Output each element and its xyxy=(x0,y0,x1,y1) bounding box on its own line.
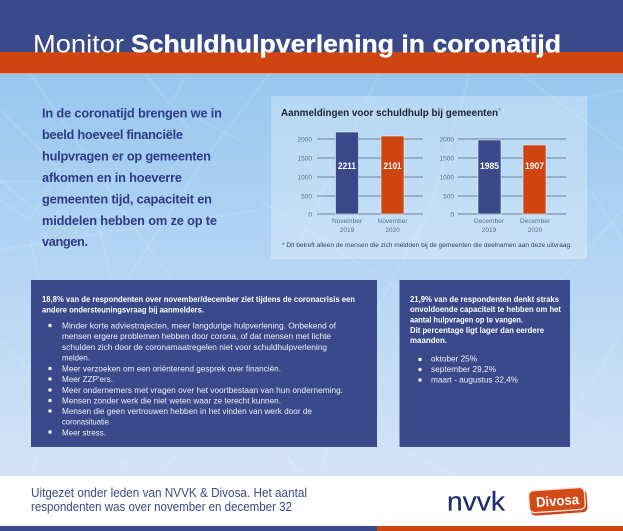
title: Monitor xyxy=(33,30,124,58)
bullet list: melden. xyxy=(62,352,90,362)
footer text: Uitgezet onder leden van NVVK & Divosa. Het aantal xyxy=(31,486,307,500)
bar chart: december: 2000 xyxy=(440,136,454,144)
panel heading: onvoldoende capaciteit te hebben om het xyxy=(410,304,561,314)
bar chart: november: November xyxy=(378,218,408,225)
chart heading: * xyxy=(498,106,502,116)
bar chart: november: 2020 xyxy=(385,227,400,234)
bar chart: december: 0 xyxy=(450,212,454,218)
bar chart: november: 2019 xyxy=(340,227,355,234)
map background xyxy=(0,73,623,477)
bar chart: november: 2000 xyxy=(298,136,312,144)
bullet list: Minder korte adviestrajecten, meer langdurige hulpverlening. Onbekend of xyxy=(62,321,337,331)
bullet list: Mensen die geen vertrouwen hebben in het vinden van werk door de xyxy=(62,406,312,416)
logo: nvvk: nvvk xyxy=(447,486,506,516)
bar chart: november: 2211 xyxy=(338,161,356,171)
intro text: vangen. xyxy=(42,234,88,249)
bar chart: december: 2019 xyxy=(482,227,497,234)
panel: ondersteuningsvraag xyxy=(31,280,377,447)
panel: chart xyxy=(271,96,587,259)
bullet list: Meer ondernemers met vragen over het voortbestaan van hun onderneming. xyxy=(62,385,343,395)
bar chart: november xyxy=(298,132,423,234)
bar chart: november: 0 xyxy=(308,212,312,218)
bullet list: Meer stress. xyxy=(62,427,106,437)
bar chart: december: 500 xyxy=(443,194,454,200)
intro text: hulpvragen er op gemeenten xyxy=(42,149,211,164)
panel heading xyxy=(410,294,561,345)
intro text: gemeenten tijd, capaciteit en xyxy=(42,192,212,207)
bullet list: Meer verzoeken om een oriënterend gesprek over financiën. xyxy=(62,364,281,374)
bar chart: november: 2101 xyxy=(384,161,402,171)
footer text: respondenten was over november en december 32 xyxy=(31,500,292,514)
bar chart: december xyxy=(440,136,566,234)
panel heading: maanden. xyxy=(410,335,447,345)
bar chart: december: 2020 xyxy=(528,227,543,234)
intro text: afkomen en in hoeverre xyxy=(42,170,182,185)
chart footnote: * Dit betreft alleen de mensen die zich meldden bij de gemeenten die deelnamen aan deze uitvraag. xyxy=(282,242,572,249)
bullet list: Mensen zonder werk die niet weten waar ze terecht kunnen. xyxy=(62,396,281,406)
bullet list: september 29,2% xyxy=(431,364,496,374)
bar chart: december: 1000 xyxy=(440,174,454,182)
panel heading: Dit percentage ligt lager dan eerdere xyxy=(410,325,544,335)
bullet list xyxy=(418,354,518,384)
header band xyxy=(0,0,623,74)
title: Schuldhulpverlening in coronatijd xyxy=(131,30,561,58)
panel heading xyxy=(42,294,355,314)
logo: Divosa xyxy=(528,487,588,516)
intro text: beeld hoeveel financiële xyxy=(42,127,183,142)
panel: capaciteit xyxy=(400,280,570,447)
footer text xyxy=(31,486,307,514)
bullet list: schulden zich door de coronamaatregelen niet voor schuldhulpverlening xyxy=(62,342,327,352)
intro text: In de coronatijd brengen we in xyxy=(42,106,222,121)
panel heading: aantal hulpvragen op te vangen. xyxy=(410,314,523,324)
bar chart: december: December xyxy=(474,218,505,225)
panel heading: 21,9% van de respondenten denkt straks xyxy=(410,294,559,304)
panel heading: 18,8% van de respondenten over november/december ziet tijdens de coronacrisis een xyxy=(42,294,355,304)
bar chart: november: 500 xyxy=(301,194,312,200)
bar chart: november: November xyxy=(332,218,363,225)
bar chart: december: 1985 xyxy=(480,161,500,172)
footer band xyxy=(0,476,623,531)
bullet list xyxy=(48,321,343,437)
bar chart: december: December xyxy=(520,218,551,225)
bar chart: november: 1000 xyxy=(298,174,312,182)
bullet list: mensen ergere problemen hebben door corona, of dat mensen met lichte xyxy=(62,331,331,341)
intro text: middelen hebben om ze op te xyxy=(42,213,217,228)
bar chart: december: 1907 xyxy=(525,161,544,172)
bar chart: december: 1500 xyxy=(440,156,454,162)
chart heading: Aanmeldingen voor schuldhulp bij gemeenten xyxy=(281,107,498,119)
bar chart: november: 1500 xyxy=(298,156,312,162)
logo: Divosa: Divosa xyxy=(535,491,580,510)
bullet list: maart - augustus 32,4% xyxy=(431,374,518,384)
panel heading: andere ondersteuningsvraag bij aanmelders. xyxy=(42,304,204,314)
intro text xyxy=(42,106,222,249)
bullet list: oktober 25% xyxy=(431,354,477,364)
bullet list: Meer ZZP'ers. xyxy=(62,374,113,384)
bullet list: coronasituatie. xyxy=(62,417,111,427)
